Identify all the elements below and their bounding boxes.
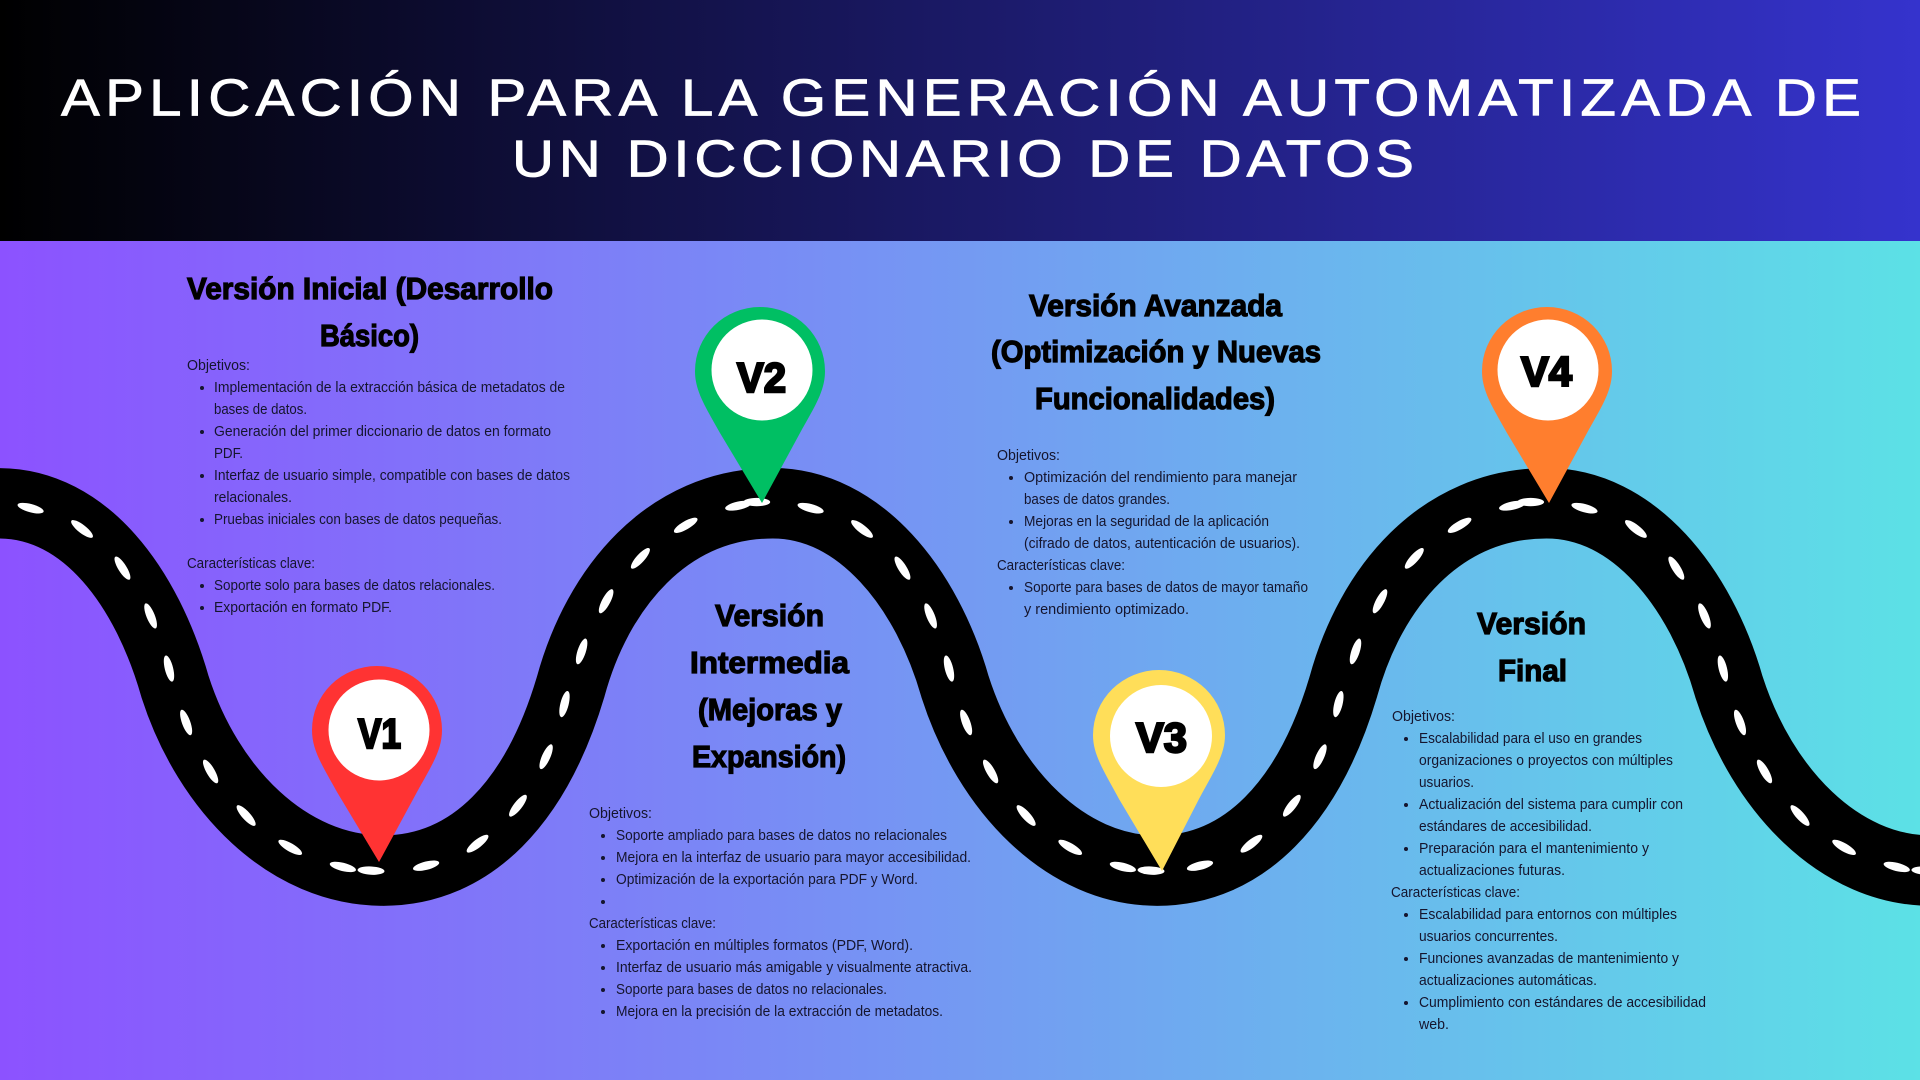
text block: Versión Intermedia details: Exportación en múltiples formatos (PDF, Word). xyxy=(616,938,913,954)
text block: Versión Avanzada details: Optimización del rendimiento para manejar xyxy=(1024,470,1297,486)
heading: Versión Avanzada: Versión Avanzada xyxy=(1029,288,1283,323)
heading: Versión Intermedia xyxy=(690,598,850,774)
text block: Versión Inicial details: Interfaz de usuario simple, compatible con bases de datos xyxy=(214,468,570,484)
text block: Versión Intermedia details: Interfaz de usuario más amigable y visualmente atractiva. xyxy=(616,960,972,976)
heading: Versión Intermedia: Versión xyxy=(715,598,824,633)
text block: Versión Final details: organizaciones o proyectos con múltiples xyxy=(1419,753,1673,769)
text block: Versión Final details: Escalabilidad para entornos con múltiples xyxy=(1419,907,1677,923)
text block: Versión Inicial details: Características clave: xyxy=(187,556,315,572)
text block: Versión Intermedia details xyxy=(589,806,972,1020)
heading: Versión Intermedia: (Mejoras y xyxy=(698,692,843,727)
text block: Versión Final details: web. xyxy=(1418,1017,1449,1033)
text block: Versión Final details: usuarios. xyxy=(1419,775,1474,791)
text block: Versión Inicial details: bases de datos. xyxy=(214,402,307,418)
heading: Versión Final: Versión xyxy=(1477,606,1586,641)
text block: Versión Intermedia details: Soporte para bases de datos no relacionales. xyxy=(616,982,887,998)
text block: Versión Final details: usuarios concurrentes. xyxy=(1419,929,1558,945)
text block: Versión Final details: Preparación para el mantenimiento y xyxy=(1419,841,1650,857)
text block: Versión Inicial details: relacionales. xyxy=(214,490,292,506)
winding road xyxy=(0,498,1920,875)
text block: Versión Intermedia details: Características clave: xyxy=(589,916,716,932)
heading: Versión Avanzada: Funcionalidades) xyxy=(1035,381,1275,416)
pin: V1 red: V1 xyxy=(358,710,401,757)
text block: Versión Final details: Funciones avanzadas de mantenimiento y xyxy=(1419,951,1680,967)
text block: Versión Final details: Actualización del sistema para cumplir con xyxy=(1419,797,1683,813)
text block: Versión Final details: Características clave: xyxy=(1391,885,1520,901)
text block: Versión Final details: Cumplimiento con estándares de accesibilidad xyxy=(1419,995,1706,1011)
text block: Versión Avanzada details xyxy=(997,448,1308,618)
pin: V3 yellow: V3 xyxy=(1136,714,1187,761)
text block: Versión Final details: estándares de accesibilidad. xyxy=(1419,819,1592,835)
text block: Versión Inicial details: Exportación en formato PDF. xyxy=(214,600,392,616)
text block: Versión Inicial details: PDF. xyxy=(214,446,243,462)
text block: Versión Avanzada details: Soporte para bases de datos de mayor tamaño xyxy=(1024,580,1308,596)
heading: Versión Avanzada: (Optimización y Nuevas xyxy=(991,334,1321,369)
text block: Versión Intermedia details: Mejora en la interfaz de usuario para mayor accesibilidad. xyxy=(616,850,971,866)
heading: Versión Inicial xyxy=(187,271,553,353)
text block: Versión Final details xyxy=(1391,709,1706,1033)
text block: Versión Inicial details: Generación del primer diccionario de datos en formato xyxy=(214,424,551,440)
text block: Versión Final details: actualizaciones automáticas. xyxy=(1419,973,1597,989)
heading: Versión Intermedia: Expansión) xyxy=(692,739,846,774)
heading: Versión Final: Final xyxy=(1498,653,1567,688)
title xyxy=(61,68,1861,188)
heading: Versión Final xyxy=(1477,606,1586,688)
heading: Versión Intermedia: Intermedia xyxy=(690,645,850,680)
text block: Versión Inicial details: Objetivos: xyxy=(187,358,250,374)
pin: V4 orange xyxy=(1482,307,1612,503)
title: UN DICCIONARIO DE DATOS xyxy=(512,129,1414,188)
pin: V2 green: V2 xyxy=(737,354,786,401)
text block: Versión Avanzada details: y rendimiento optimizado. xyxy=(1024,602,1189,618)
text block: Versión Final details: Escalabilidad para el uso en grandes xyxy=(1419,731,1642,747)
text block: Versión Avanzada details: Objetivos: xyxy=(997,448,1060,464)
header band xyxy=(0,0,1920,241)
text block: Versión Intermedia details: Optimización de la exportación para PDF y Word. xyxy=(616,872,918,888)
pin: V3 yellow xyxy=(1093,670,1225,871)
text block: Versión Avanzada details: Características clave: xyxy=(997,558,1125,574)
text block: Versión Avanzada details: Mejoras en la seguridad de la aplicación xyxy=(1024,514,1269,530)
pin: V2 green xyxy=(695,307,825,503)
text block: Versión Intermedia details: Mejora en la precisión de la extracción de metadatos. xyxy=(616,1004,943,1020)
heading: Versión Inicial: Básico) xyxy=(320,318,419,353)
heading: Versión Inicial: Versión Inicial (Desarrollo xyxy=(187,271,553,306)
text block: Versión Final details: Objetivos: xyxy=(1392,709,1455,725)
pin: V1 red xyxy=(312,666,442,862)
text block: Versión Inicial details: Soporte solo para bases de datos relacionales. xyxy=(214,578,495,594)
body background xyxy=(0,241,1920,1080)
text block: Versión Intermedia details: Soporte ampliado para bases de datos no relacionales xyxy=(616,828,947,844)
text block: Versión Inicial details xyxy=(187,358,570,616)
text block: Versión Intermedia details: Objetivos: xyxy=(589,806,652,822)
pin: V4 orange: V4 xyxy=(1521,348,1573,395)
text block: Versión Final details: actualizaciones futuras. xyxy=(1419,863,1565,879)
text block: Versión Avanzada details: bases de datos grandes. xyxy=(1024,492,1170,508)
title: APLICACIÓN PARA LA GENERACIÓN AUTOMATIZADA DE xyxy=(61,68,1861,127)
text block: Versión Avanzada details: (cifrado de datos, autenticación de usuarios). xyxy=(1024,536,1300,552)
heading: Versión Avanzada xyxy=(991,288,1321,416)
text block: Versión Inicial details: Implementación de la extracción básica de metadatos de xyxy=(214,380,565,396)
text block: Versión Inicial details: Pruebas iniciales con bases de datos pequeñas. xyxy=(214,512,502,528)
